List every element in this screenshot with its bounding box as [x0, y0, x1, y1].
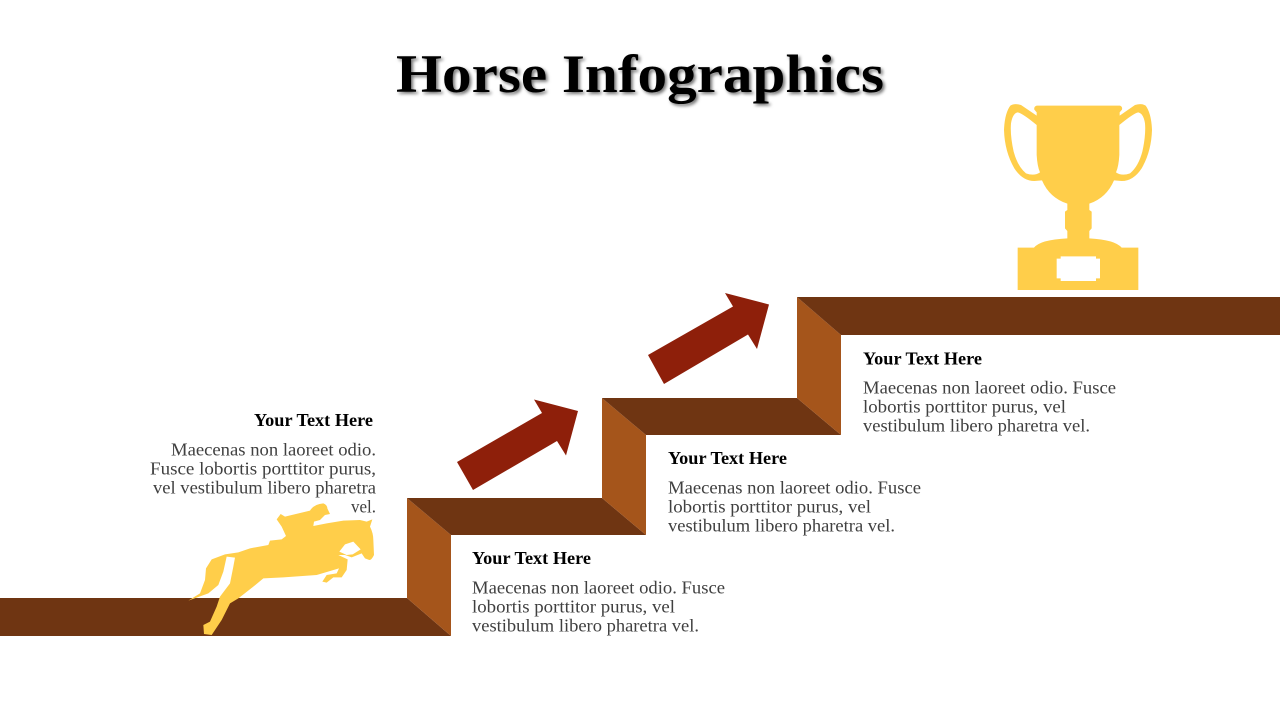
body copy: Fusce lobortis porttitor purus, — [150, 458, 376, 478]
icon: horse and rider jumping — [188, 503, 374, 635]
ledge 1 — [407, 498, 646, 535]
body copy — [150, 440, 376, 516]
body copy: lobortis porttitor purus, vel — [472, 596, 675, 616]
ledge 2 — [602, 398, 841, 435]
body copy: vestibulum libero pharetra vel. — [668, 516, 895, 536]
heading: Your Text Here — [472, 548, 591, 568]
body copy: lobortis porttitor purus, vel — [668, 496, 871, 516]
body copy: vestibulum libero pharetra vel. — [472, 616, 699, 636]
title: Horse Infographics — [396, 44, 884, 104]
heading: Your Text Here — [254, 410, 373, 430]
body copy — [668, 478, 921, 536]
body copy: Maecenas non laoreet odio. Fusce — [472, 578, 725, 598]
riser 1 — [407, 498, 451, 636]
body copy — [863, 378, 1116, 436]
body copy: lobortis porttitor purus, vel — [863, 396, 1066, 416]
text block: third step — [668, 448, 921, 536]
body copy: vel vestibulum libero pharetra — [153, 478, 376, 498]
body copy: Maecenas non laoreet odio. — [171, 440, 376, 460]
riser 3 — [797, 297, 841, 435]
text block: second step — [472, 548, 725, 636]
arrow: lower step — [457, 400, 578, 490]
icon: trophy — [1004, 104, 1152, 290]
text block: fourth step — [863, 348, 1116, 436]
top ledge — [797, 297, 1280, 335]
arrow: upper step — [648, 293, 769, 384]
body copy: vel. — [351, 496, 376, 516]
riser 2 — [602, 398, 646, 535]
body copy: vestibulum libero pharetra vel. — [863, 416, 1090, 436]
body copy: Maecenas non laoreet odio. Fusce — [668, 478, 921, 498]
body copy — [472, 578, 725, 636]
heading: Your Text Here — [863, 348, 982, 368]
ground ledge — [0, 598, 451, 636]
body copy: Maecenas non laoreet odio. Fusce — [863, 378, 1116, 398]
text block: first step (left) — [150, 410, 376, 516]
staircase — [0, 297, 1280, 636]
heading: Your Text Here — [668, 448, 787, 468]
